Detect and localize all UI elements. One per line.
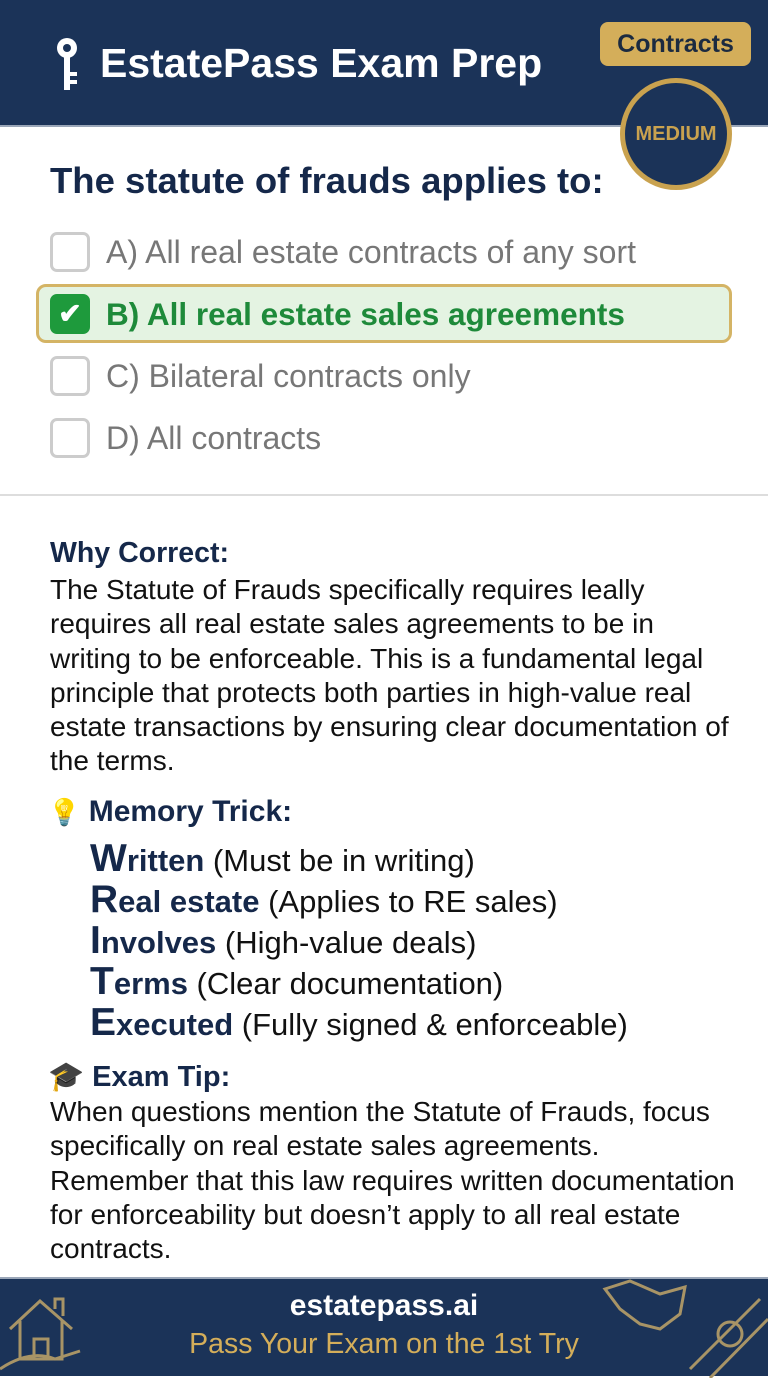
option C: C) Bilateral contracts only [106, 358, 471, 394]
title: EstatePass Exam Prep [100, 40, 542, 86]
badge: medium [620, 78, 732, 190]
memory list [90, 837, 628, 1044]
icon: handshake and diploma [602, 1279, 768, 1378]
option B text: ✔ [58, 298, 82, 329]
option A: A) All real estate contracts of any sort [106, 234, 636, 270]
exam tip heading: 🎓 Exam Tip: [48, 1061, 230, 1093]
icon: key [57, 38, 77, 90]
tag: Contracts [600, 22, 751, 66]
exam tip body: contracts. [50, 1233, 171, 1264]
memory list: Written (Must be in writing) [90, 837, 475, 880]
memory list: Real estate (Applies to RE sales) [90, 878, 558, 921]
header bar [0, 0, 768, 127]
tag: Contracts: Contracts [617, 30, 734, 58]
exam tip body: for enforceability but doesn’t apply to all real estate [50, 1199, 680, 1230]
option B selected [36, 284, 732, 343]
why correct body: requires all real estate sales agreements to be in [50, 608, 654, 639]
why correct body [50, 574, 729, 776]
footer site: estatepass.ai [290, 1289, 478, 1322]
why correct body: the terms. [50, 745, 174, 776]
memory list: Terms (Clear documentation) [90, 960, 503, 1003]
option D: D) All contracts [106, 420, 321, 456]
exam tip body [50, 1096, 735, 1264]
memory list: Executed (Fully signed & enforceable) [90, 1001, 628, 1044]
exam tip body: specifically on real estate sales agreements. [50, 1130, 599, 1161]
why correct heading: Why Correct: [50, 537, 229, 569]
memory list: Involves (High-value deals) [90, 919, 476, 962]
why correct body: writing to be enforceable. This is a fundamental legal [50, 643, 703, 674]
icon: house in hand [0, 1298, 80, 1370]
footer [0, 1277, 768, 1376]
why correct body: The Statute of Frauds specifically requires leally [50, 574, 644, 605]
memory trick heading: 💡 Memory Trick: [48, 795, 292, 828]
why correct body: estate transactions by ensuring clear documentation of [50, 711, 729, 742]
question: The statute of frauds applies to: [50, 160, 604, 201]
why correct body: principle that protects both parties in high-value real [50, 677, 691, 708]
option B text: B) All real estate sales agreements [106, 296, 625, 332]
badge: medium: MEDIUM [635, 123, 717, 145]
exam tip body: When questions mention the Statute of Frauds, focus [50, 1096, 710, 1127]
exam tip body: Remember that this law requires written documentation [50, 1165, 735, 1196]
footer tagline: Pass Your Exam on the 1st Try [189, 1328, 579, 1360]
